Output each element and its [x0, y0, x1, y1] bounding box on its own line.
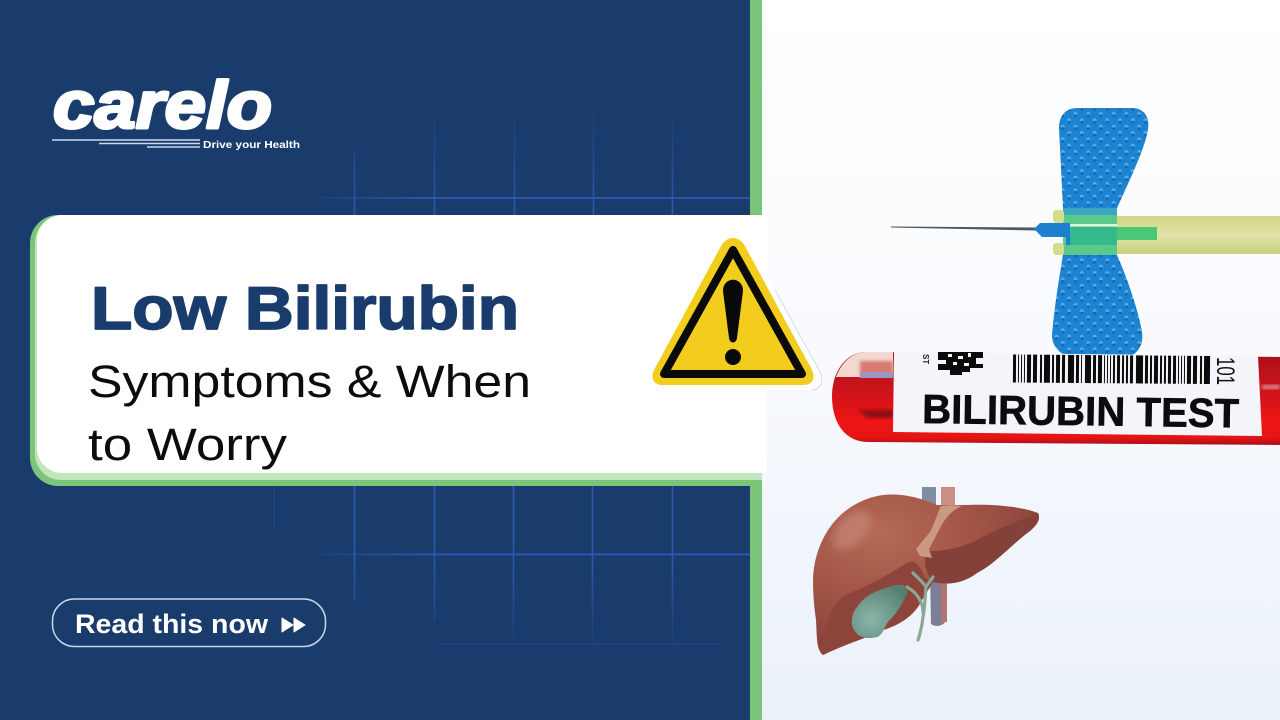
gallbladder — [852, 585, 907, 638]
subheading line 1: Symptoms & When — [88, 356, 531, 407]
button: read this now — [52, 599, 326, 646]
falciform ligament — [916, 505, 962, 558]
tube — [1117, 216, 1280, 254]
subheading line 2: to Worry — [88, 419, 288, 470]
small label ST: ST — [921, 354, 930, 364]
blood test tube — [832, 352, 1280, 445]
bile duct — [907, 573, 933, 640]
label number 101: 101 — [1211, 357, 1239, 385]
needle shaft — [891, 226, 1036, 230]
data matrix gaps — [948, 353, 971, 366]
hub — [1063, 208, 1117, 255]
green vertical strip — [750, 0, 762, 720]
tube body — [832, 352, 1280, 445]
card light green edge — [35, 215, 762, 480]
icon: double arrow — [282, 618, 305, 632]
label text: BILIRUBIN TEST — [922, 386, 1239, 436]
liver illustration — [813, 487, 1039, 655]
right tube highlight — [1262, 385, 1280, 389]
panel: title card — [30, 215, 767, 486]
tube glass top — [836, 352, 893, 377]
background grid pattern — [274, 105, 750, 655]
blood vessels — [922, 487, 936, 509]
logo — [52, 68, 300, 151]
panel: navy background — [0, 0, 750, 720]
logo wordmark: carelo — [53, 68, 272, 143]
panel: photo background — [762, 0, 1280, 720]
left lobe underside — [925, 513, 1039, 584]
logo speed lines — [52, 140, 200, 147]
data matrix code — [938, 352, 983, 375]
blue needle tip — [1034, 223, 1070, 245]
butterfly needle — [891, 108, 1280, 357]
highlight — [825, 503, 879, 557]
wing lower — [1052, 255, 1142, 357]
button label: Read this now — [75, 609, 268, 639]
heading: Low Bilirubin — [91, 275, 519, 342]
icon: warning triangle — [646, 232, 822, 390]
liver body — [813, 494, 1039, 655]
inner green core — [1070, 227, 1157, 245]
wing upper — [1059, 108, 1148, 208]
liver underside shading — [820, 561, 933, 655]
label — [893, 352, 1262, 436]
logo tagline: Drive your Health — [203, 139, 300, 151]
tube dark band — [858, 410, 893, 418]
card white face — [37, 215, 767, 473]
card green shadow — [30, 215, 762, 486]
barcode — [1013, 368, 1210, 370]
